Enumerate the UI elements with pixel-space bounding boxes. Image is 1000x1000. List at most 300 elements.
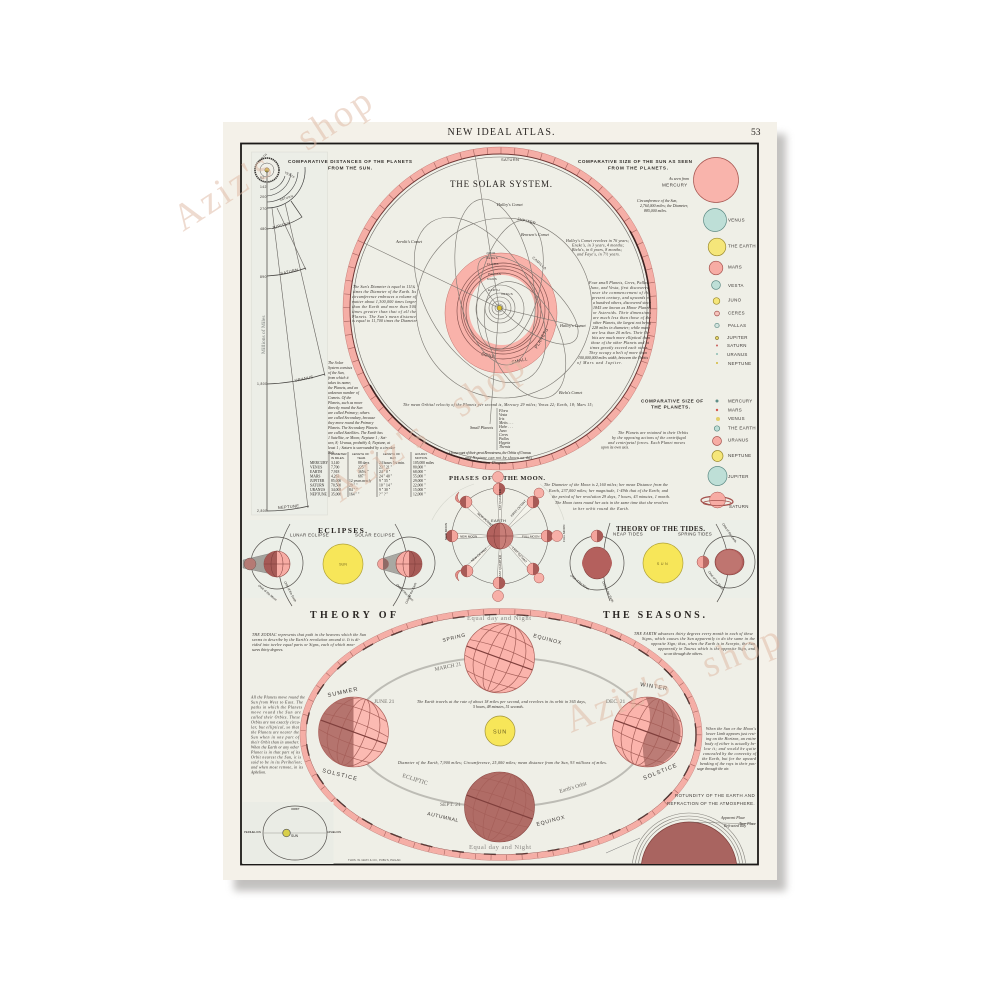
text: four small planets: 100,000,000 miles width, between the Orbits (578, 356, 648, 361)
panel: the solar system description: are called Satellites. The Earth has (328, 431, 383, 435)
table: planet data: NEPTUNE (310, 492, 328, 496)
heading: comparative size of the planets: COMPARATIVE SIZE OF (641, 398, 703, 404)
heading: eclipses: ECLIPSES. (318, 526, 367, 535)
text: sun's lower limb: low it; and would be quite (704, 747, 756, 751)
watermarks: Aziz's shop (559, 616, 789, 741)
text: earth travels (417, 700, 586, 710)
note: orbits: and centripetal forces. Each Planet moves (608, 441, 685, 445)
panel: the solar system description (327, 361, 396, 455)
text: sun's lower limb: When the Sun or the Moon's (706, 727, 756, 731)
text: sun's diameter: matter about 1,300,000 times larger (352, 300, 416, 305)
text: sun's diameter: The Sun's Diameter is equal to 111¾ (353, 285, 415, 289)
text: planets orbits: and when most remote, in its (251, 766, 303, 770)
sun discs and labels: VESTA (728, 283, 744, 288)
text: four small planets: or Asteroids. Their dimensions (593, 311, 651, 315)
text: planets orbits: their Orbit than in another. (251, 740, 299, 744)
note: moon facts: The Moon turns round her axis in the same time that she revolves (555, 501, 668, 505)
table: planet data: 10 " 14 " (379, 484, 393, 488)
table: planet data: IN MILES. (331, 456, 345, 460)
sun discs and labels: VENUS (728, 218, 745, 222)
panel: the solar system description: are called Secondary, because (328, 416, 375, 421)
text: equal day and night: Equal day and Night (469, 844, 531, 851)
heading: theory of the tides: THEORY OF THE TIDES. (616, 525, 705, 533)
orbit date labels: Earth's Orbit (559, 781, 588, 795)
sun (485, 716, 515, 746)
table: planet data: 24 " 0 " (379, 470, 391, 474)
note: sun circumference: 885,000 miles. (644, 209, 667, 214)
sun in eclipses (323, 544, 363, 584)
season labels: EQUINOX (532, 633, 563, 647)
distance scale diagram: VESTA (284, 170, 296, 179)
heading: theory of the seasons: THE SEASONS. (603, 610, 706, 621)
text: Halley's comet periods: Biela's, in 6 years, 8 months; (572, 248, 623, 253)
text: sun's diameter: times the Diameter of the Earth. Its (353, 290, 416, 294)
table: planet data: 225 " (358, 466, 366, 470)
text: four small planets: those of the other Planets and at (591, 341, 650, 345)
text: earth travels: The Earth travels at the rate of about 18 miles per second, and revolves in its orbit in 365 days, (417, 700, 586, 705)
panel: rotundity of the earth (606, 794, 756, 864)
note: moon facts (544, 483, 670, 511)
distance scale diagram: SATURN (280, 267, 299, 276)
season labels: AUTUMNAL (427, 811, 459, 824)
text: equal day and night (467, 615, 531, 851)
planet discs and labels: MERCURY (728, 398, 753, 404)
sun discs and labels: SATURN (727, 343, 747, 348)
text: planets orbits: paths in which the Planets (250, 706, 302, 710)
diagram: neap tides: Orbit of the Moon (569, 574, 590, 591)
zone of small planets: PLANETS (534, 327, 549, 350)
panel: the solar system description: Planets, such as move (327, 401, 363, 406)
watermarks (165, 78, 789, 741)
table: planet data: 12,000 " (413, 492, 426, 498)
text: planets orbits: Sun from West to East. The (251, 700, 303, 704)
note: as seen from mercury (662, 177, 689, 188)
distance tick labels: 200 (260, 195, 267, 199)
list: small planets: Juno (499, 429, 507, 433)
axis label: millions of miles: Millions of Miles (260, 315, 267, 354)
text: sun's lower limb: lower Limb appears just rest- (706, 732, 757, 736)
orbit date labels: JUNE 21 (374, 699, 395, 705)
text: remoteness note: Diagram. (491, 461, 507, 465)
panel: the solar system description: Belt. (328, 451, 335, 455)
moon diagram: 1ST QUARTER (498, 488, 502, 510)
diagram: neap tides: Orbit of the Earth (601, 581, 615, 603)
heading: comparative distances: FROM THE SUN. (328, 166, 372, 170)
table: planet data: DIAMETER (331, 452, 347, 456)
text: planets orbits: the Planets are nearer the (251, 730, 299, 734)
distance tick labels: 1,800 (257, 382, 267, 386)
heading: theory of the seasons (310, 610, 706, 621)
orbit and comet labels (395, 157, 587, 430)
heading: theory of the tides: NEAP TIDES (613, 532, 643, 536)
heading: rotundity: ROTUNDITY OF THE EARTH AND (675, 793, 755, 798)
table: planet data: 85,000 (331, 479, 341, 484)
table: planet data: SATURN (310, 484, 325, 488)
panel: orbit inset: PERIHELION (244, 830, 261, 834)
earth orbit / ecliptic (353, 657, 647, 807)
note: orbits: by the opposing actions of the centrifugal (612, 436, 686, 440)
text: orbital velocity: The mean Orbital velocity of the Planets per second is, Mercury 29 miles; Venus 22; Earth, 18; Mars 15; (403, 403, 594, 408)
text: the zodiac: sures thirty degrees. (252, 648, 283, 652)
sun at centre (497, 306, 502, 310)
table: planet data: LENGTH OF (352, 452, 369, 456)
table: planet data: MOTION. (415, 456, 428, 460)
panel: orbit inset: SUN (291, 834, 299, 838)
text: sun's lower limb: the Earth, but for the upward (702, 757, 756, 762)
moon diagram: FIRST OCTANT (510, 499, 527, 518)
poster (179, 96, 790, 895)
orbit and comet labels: MARS (487, 277, 497, 281)
note: sun circumference: 2,764,000 miles; the Diameter, (640, 204, 688, 209)
panel: the solar system description: The Solar (328, 361, 344, 365)
text: four small planets: times greatly exceed each other. (590, 346, 648, 350)
table: planet data: 22,000 " (413, 484, 426, 488)
distance scale diagram: URANUS (294, 374, 314, 383)
text: sun's lower limb: concealed by the convexity of (703, 752, 757, 756)
table: planet data: 15,000 " (413, 488, 426, 493)
diagram: spring tides (697, 522, 755, 602)
text: sun's diameter: is equal to 11,700 times the Diameter (352, 319, 417, 324)
text: Halley's comet periods (565, 239, 630, 258)
text: planets orbits: called their Orbits. These (251, 716, 300, 720)
planet discs and labels: THE EARTH (728, 426, 756, 430)
panel: the solar system description: Planets. The Secondary Planets (327, 426, 378, 430)
orbit and comet labels: PALLAS (488, 272, 501, 276)
table: planet data: 9 " 30 " (379, 488, 391, 492)
distance tick labels: 890 (260, 275, 267, 279)
text: the earth advances: THE EARTH advances thirty degrees every month in each of these (634, 632, 753, 636)
distance tick labels: 270 (260, 207, 267, 211)
orbit and comet labels: Halley's Comet (496, 202, 524, 207)
season labels: SPRING (442, 632, 467, 644)
text: planets orbits: When the Earth or any other (251, 746, 299, 750)
text: planets orbits: Sun when in one part of (251, 736, 300, 740)
text: sun's diameter: circumference embraces a volume of (352, 295, 417, 299)
heading: rotundity: REFRACTION OF THE ATMOSPHERE. (667, 801, 755, 806)
text: sun's diameter: Planets. The Sun's mean distance (351, 315, 416, 319)
heading: comparative size of the sun: FROM THE PLANETS. (608, 166, 668, 170)
heading: comparative distances (288, 159, 412, 170)
orbit date labels: MARCH 21 (434, 661, 462, 673)
sun discs and labels: NEPTUNE (728, 361, 751, 366)
text: the zodiac: seems to describe by the Earth's revolution around it. It is di- (252, 638, 361, 642)
table: planet data: EARTH (310, 470, 322, 474)
table: planet data: 80,000 " (413, 466, 426, 470)
table: planet data: 70,500 (331, 484, 341, 488)
season labels: SOLSTICE (322, 768, 358, 783)
distance tick labels: 142 (260, 185, 267, 189)
moon diagram: NEW MOON (444, 523, 448, 540)
heading: the solar system: THE SOLAR SYSTEM. (450, 179, 552, 189)
list: small planets: Metis . . . (498, 421, 514, 425)
panel: the solar system description: System consists (328, 366, 353, 370)
planet discs and labels: MARS (728, 408, 742, 412)
text: the zodiac: vided into twelve equal parts or Signs, each of which mea- (252, 643, 356, 648)
text: equal day and night: Equal day and Night (467, 615, 531, 622)
panel: the solar system description: are called Primary; others (328, 411, 370, 415)
list: small planets: Vesta (499, 413, 507, 417)
heading: phases of the moon: PHASES OF (449, 475, 492, 482)
text: the earth advances: Signs, which causes the Sun apparently to do the same in the (642, 637, 755, 642)
panel: phases of the moon (432, 472, 670, 602)
table: planet data: 9 " 55 " (379, 479, 391, 483)
moon diagram: NEW OCTANT (476, 512, 494, 528)
orbit and comet labels: SATURN (501, 157, 519, 162)
publisher credit: THOS. W. GRAY & CO., PUBL'S, PHILAD. (348, 858, 401, 862)
panel: theory of the seasons (300, 608, 702, 860)
text: the earth advances: so on through the others. (664, 652, 703, 656)
moon diagram: EARTH (491, 518, 506, 523)
heading: comparative size of the sun (578, 159, 693, 170)
note: sun circumference: Circumference of the Sun, (637, 199, 677, 204)
text: four small planets: 1845 are known as Minor Planets (593, 306, 651, 310)
watermarks: Aziz's shop (165, 78, 382, 240)
text: planets orbits: lar, but elliptical, so that (251, 726, 300, 730)
sun discs and labels: PALLAS (728, 323, 746, 328)
diagram: solar eclipse (378, 524, 435, 606)
panel: the solar system description: from which it (328, 376, 350, 380)
note: as seen from mercury: MERCURY (662, 182, 688, 188)
panel: the solar system description: takes its name; (328, 381, 352, 385)
sun in tides: SUN (657, 562, 669, 566)
watermarks: Aziz's shop (321, 343, 535, 510)
heading: rotundity (667, 794, 754, 805)
orbit and comet labels: JUPITER (517, 216, 537, 226)
orbit and comet labels: Halley's Comet (559, 323, 587, 328)
paper sheet (223, 122, 777, 880)
orbit and comet labels: Small Planets (470, 425, 494, 430)
planet discs and labels: VENUS (728, 416, 745, 421)
list: small planets: Themis (499, 445, 511, 449)
sun in tides (643, 543, 683, 583)
diagram: solar eclipse: Orbit of the Earth (404, 582, 418, 604)
heading: phases of the moon (449, 475, 545, 482)
moon diagram (444, 472, 566, 602)
orbit date labels: SEPT. 21 (440, 802, 461, 808)
distance scale diagram: EARTH (257, 152, 268, 164)
note: orbits: upon its own axis. (601, 446, 629, 450)
season labels: WINTER (640, 682, 668, 692)
text: earth diameter: Diameter of the Earth, 7,900 miles; Circumference, 25,000 miles; mean distance from the Sun, 93 millions of miles. (397, 761, 607, 766)
poster shadow (234, 134, 786, 891)
orbit and comet labels: CAMILLA (531, 256, 547, 271)
table: planet data: 12 years nearly (349, 479, 372, 483)
heading: theory of the tides: SPRING TIDES (678, 532, 712, 536)
text: planets orbits: said to be in its Perihelion; (251, 760, 303, 764)
text: four small planets: Four small Planets, Ceres, Pallas, (588, 281, 649, 286)
orbit and comet labels: CERES (486, 256, 498, 260)
moon diagram: LAST OCTANT (511, 546, 528, 564)
text: planets orbits: Orbit nearest the Sun, it is (251, 756, 301, 760)
planet discs and labels: URANUS (728, 438, 749, 442)
sun discs and labels: URANUS (727, 352, 748, 357)
heading: comparative size of the planets: THE PLANETS. (651, 404, 690, 410)
season labels: EQUINOX (536, 814, 566, 828)
text: sun's lower limb: bending of the rays in their pas- (700, 762, 757, 766)
moon diagram: NEW MOON (460, 534, 477, 538)
distance scale diagram: SATURN (279, 194, 294, 202)
orbit date labels (374, 661, 626, 808)
page number: 53 (751, 128, 761, 138)
heading: comparative distances: COMPARATIVE DISTANCES OF THE PLANETS (288, 159, 412, 164)
text: planets orbits: move round the Sun are (251, 710, 301, 714)
panel: the solar system description: urn, 8; Uranus, probably 4; Neptune, at (328, 441, 391, 446)
orbit date labels: DEC. 21 (606, 699, 626, 705)
diagram: lunar eclipse: Orbit of the Earth (283, 581, 298, 603)
table: planet data: 35,000 (331, 492, 341, 498)
globe: autumnal equinox (455, 762, 544, 852)
panel: orbit inset: ORBIT (291, 807, 300, 811)
panel: orbit inset: APHELION (327, 830, 341, 834)
table: planet data: DAY. (390, 456, 397, 460)
table: planet data: 55,000 " (413, 474, 426, 480)
text: four small planets: bits are much more elliptical than (592, 336, 650, 340)
orbit and comet labels: VENUS (501, 292, 513, 296)
panel: comparative distances of the planets (252, 152, 328, 515)
moon diagram: NEW OCTANT (470, 547, 488, 563)
heading: theory of the seasons: THEORY OF (310, 610, 396, 621)
orbit and comet labels: Aerolit's Comet (395, 239, 423, 244)
globe: spring equinox (455, 613, 544, 703)
table: planet data: JUPITER (310, 479, 325, 483)
note: moon facts: the period of her revolution 29 days, 7 hours, 43 minutes, 1 month. (552, 495, 670, 500)
table: planet data: 164 " " (349, 492, 360, 496)
text: Halley's comet periods: and Faye's, in 7½ years. (577, 252, 620, 258)
text: the earth advances: opposite Sign; thus, when the Earth is in Scorpio, the Sun (651, 642, 755, 647)
table: planet data: 84 " " (349, 488, 358, 492)
text: sun's diameter (351, 285, 417, 324)
text: the zodiac: THE ZODIAC represents that path in the heavens which the Sun (252, 633, 366, 637)
orbit and comet labels: Biela's Comet (559, 390, 583, 395)
distance scale diagram: JUPITER (271, 221, 291, 230)
note: moon facts: The Diameter of the Moon is 2,160 miles; her mean Distance from the (544, 483, 668, 488)
note: moon facts: in her orbit round the Earth. (573, 507, 629, 511)
zodiac ring (343, 147, 657, 470)
moon diagram: FULL MOON (522, 534, 539, 538)
text: sun's lower limb: body of either is actually be- (705, 742, 757, 746)
planet discs and labels: NEPTUNE (728, 453, 751, 458)
sun discs and labels: THE EARTH (728, 244, 756, 248)
text: four small planets (577, 281, 651, 365)
distance tick labels: 92 (260, 176, 264, 180)
text: four small planets: 228 miles in diameter; while many (592, 326, 650, 330)
season labels (322, 632, 679, 828)
globe: winter solstice (603, 687, 692, 777)
table: planet data: 24 " 40 " (379, 474, 393, 478)
text: four small planets: near the commencement of the (592, 291, 650, 295)
diagram: earth horizon (606, 812, 756, 864)
sun discs and labels (694, 158, 756, 366)
note: sun circumference (637, 199, 688, 214)
text: four small planets: They occupy a belt of more than (589, 351, 647, 355)
panel: comparative size of the sun (578, 158, 756, 366)
table: planet data: 68,000 " (413, 470, 426, 475)
text: four small planets: are less than 20 miles. Their Or- (592, 331, 651, 335)
heading: eclipses: SOLAR ECLIPSE (355, 532, 395, 538)
heading: comparative size of the sun: COMPARATIVE SIZE OF THE SUN AS SEEN (578, 159, 693, 164)
diagram: earth horizon: Refracted Ray (723, 824, 746, 828)
text: planets orbits: Orbits are not exactly circu- (251, 720, 301, 724)
text: remoteness note: and Neptune can not be shown on this (465, 456, 532, 460)
panel: the solar system description: they move round the Primary (328, 421, 374, 425)
table: planet data: MARS (310, 474, 320, 478)
diagram: solar eclipse: Orbit of the Moon (395, 583, 415, 602)
diagram: earth horizon: Apparent Place (720, 816, 745, 820)
text: the earth advances: apparently in Taurus which is the opposite Sign, and (658, 647, 755, 652)
table: planet data: 4,263 (331, 474, 339, 480)
text: planets orbits: Aphelion. (250, 770, 266, 774)
zone of small planets: ZONE (481, 351, 495, 359)
text: sun's lower limb: ing on the Horizon, an entire (706, 737, 756, 742)
orbit and comet labels: FLORA (487, 262, 499, 266)
table: planet data: HOURLY (415, 452, 427, 456)
text: Halley's comet periods: Halley's Comet revolves in 76 years; (565, 239, 630, 243)
distance tick labels: 2,800 (257, 509, 267, 513)
table: planet data: 24 hours 5¼ min. (379, 461, 405, 465)
table: planet data: 29,000 " (413, 479, 426, 484)
list: small planets: Iris (498, 417, 505, 421)
text: four small planets: a hundred others, discovered since (593, 301, 651, 306)
text: Halley's comet periods: Encke's, in 3 years, 4 months; (571, 244, 625, 248)
heading: theory of the tides (613, 525, 712, 536)
planet discs and labels (708, 398, 756, 509)
table: planet data: 34,000 (331, 488, 341, 493)
note: orbits: The Planets are retained in their Orbits (618, 431, 688, 435)
list: small planets: Ceres (499, 433, 508, 437)
text: four small planets: Juno, and Vesta, first discovered (590, 286, 649, 291)
list: small planets: Pallas (498, 437, 509, 441)
text: sun's diameter: times greater than that of all the (352, 310, 416, 314)
list: small planets: Flora (498, 409, 508, 413)
table: planet data (310, 452, 434, 498)
panel: the solar system description: least 1 ; Saturn is surrounded by a circular (328, 446, 396, 450)
text: four small planets: are much less than those of the (593, 316, 651, 320)
text: remoteness note (449, 451, 532, 465)
panel: the solar system description: Comets. Of the (328, 396, 352, 400)
sun discs and labels: CERES (728, 310, 745, 316)
panel: the solar system description: the Planets, and an (328, 386, 358, 391)
table: planet data: 88 days (358, 461, 370, 465)
text: four small planets: other Planets, the largest not being (593, 321, 651, 326)
note: orbits (601, 431, 688, 450)
diagram: lunar eclipse (243, 524, 303, 606)
zone of small planets (445, 253, 557, 373)
table: planet data: 365¼ " (358, 470, 369, 474)
heading: comparative size of the planets (641, 398, 703, 410)
table: planet data: ? " ? " (379, 492, 389, 496)
panel: the solar system description: 1 Satellite, or Moon; Neptune 1 ; Sat- (328, 436, 387, 441)
text: four small planets: of Mars and Jupiter. (577, 361, 622, 365)
text: planets orbits (250, 696, 305, 774)
diagram: neap tides (569, 523, 624, 603)
table: planet data: 7,700 (331, 466, 339, 470)
heading: eclipses (290, 526, 395, 538)
season labels: SUMMER (327, 687, 359, 699)
text: earth travels: 5 hours, 48 minutes, 51 seconds. (473, 705, 524, 710)
heading: eclipses: LUNAR ECLIPSE (290, 532, 329, 538)
panel: the solar system description: of the Sun, (328, 371, 345, 376)
table: planet data: YEAR. (357, 456, 366, 460)
planet discs and labels: SATURN (729, 504, 749, 509)
panel: theory of the tides (569, 522, 755, 603)
sun discs and labels: MARS (728, 264, 742, 270)
moon diagram: LAST QUARTER (498, 554, 502, 578)
text: planets orbits: All the Planets move round the (250, 696, 305, 700)
panel: the solar system description: directly round the Sun (328, 406, 362, 410)
sun in eclipses: SUN (339, 562, 347, 566)
season labels: SOLSTICE (643, 763, 679, 782)
panel: the solar system (343, 147, 657, 470)
